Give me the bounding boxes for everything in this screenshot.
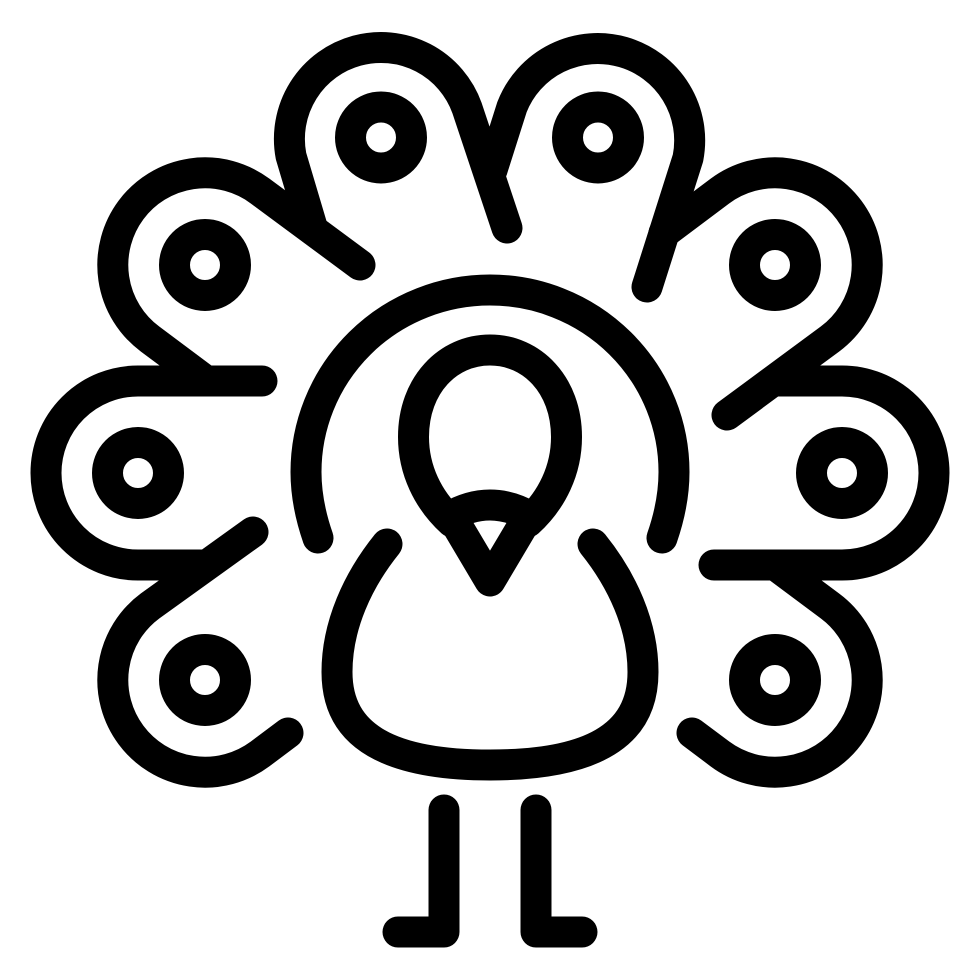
left leg xyxy=(398,810,444,932)
head xyxy=(414,350,566,522)
feather: lower left xyxy=(113,532,288,772)
body xyxy=(337,544,643,765)
feather: middle left xyxy=(46,381,262,565)
feather: upper left xyxy=(113,173,360,380)
feather: upper right xyxy=(664,173,867,415)
feather: lower right xyxy=(692,565,867,772)
feather: middle right xyxy=(714,381,934,565)
right leg xyxy=(536,810,582,932)
feather: top right xyxy=(492,49,690,287)
beak xyxy=(449,505,531,581)
feather: top left xyxy=(289,47,507,230)
neck arc xyxy=(306,290,674,538)
